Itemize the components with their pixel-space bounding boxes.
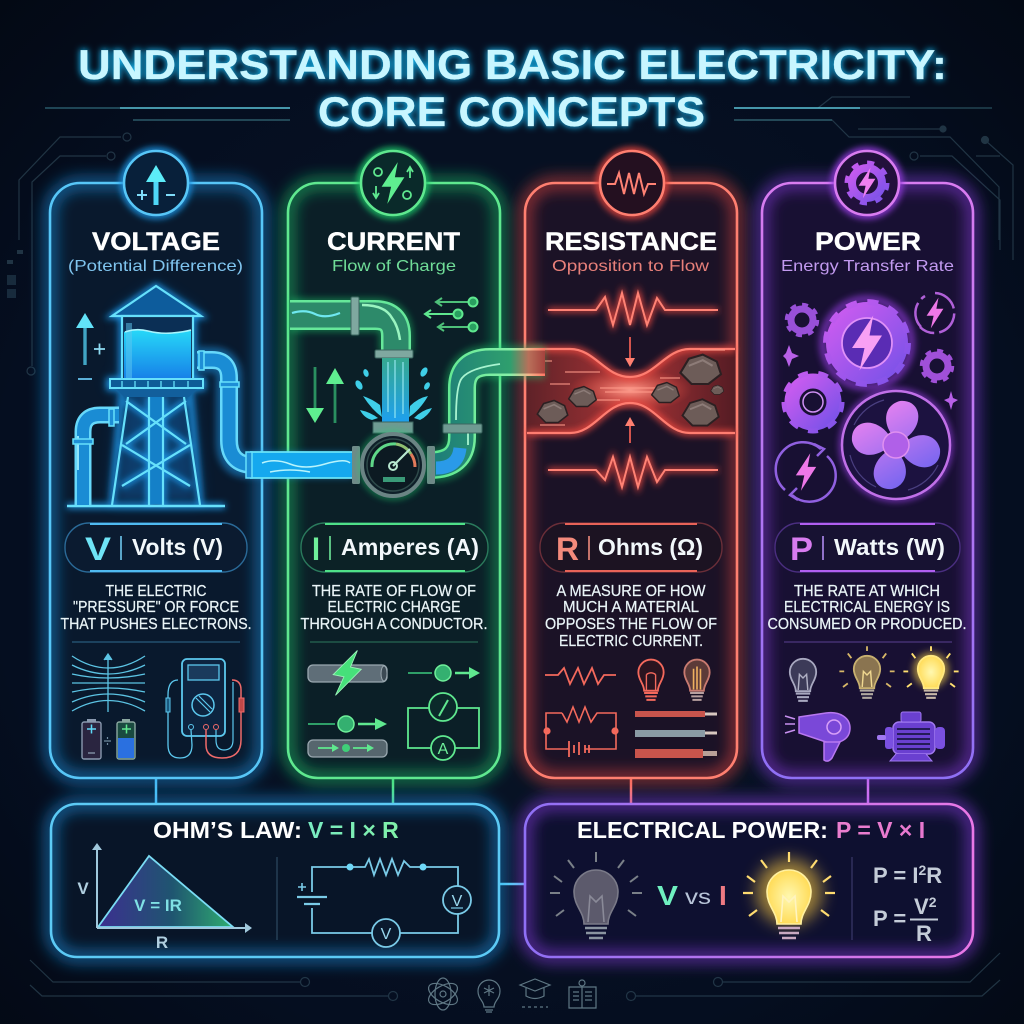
electrons moving left [425,298,478,332]
panel: current [288,150,500,778]
series circuit diagram: V [452,893,463,910]
icon: power badge [834,150,900,216]
unit pill: volts: Volts (V) [132,534,223,560]
icon: open book [569,980,596,1008]
current description: THROUGH A CONDUCTOR. [300,616,488,633]
icon: electric motor [877,712,945,761]
unit pill: amperes [301,523,488,572]
subtitle: opposition to flow: Opposition to Flow [552,258,710,275]
heading: ohm's law: OHM’S LAW: V = I × R [153,817,399,843]
icon: red bulb [638,660,664,700]
resistor wave top [548,293,718,325]
panel: resistance [525,150,737,778]
heading: electrical power: ELECTRICAL POWER: P = V × I [577,817,925,843]
voltage description: THAT PUSHES ELECTRONS. [60,616,252,633]
heading: resistance: RESISTANCE [545,228,717,256]
icon: ring bolt [915,293,954,333]
left feed pipe [78,415,119,505]
connecting pipe: voltage to current [197,351,354,478]
icon: dim bulb [790,659,816,701]
illustration: water tower [67,286,225,506]
water splash [354,366,432,420]
power description: CONSUMED OR PRODUCED. [768,616,966,633]
icon: resistance badge [599,150,665,216]
constricted pipe with rocks [527,349,735,433]
footer icons [425,978,596,1012]
icon: resistor circuit [544,707,618,757]
illustration: gears [784,299,952,431]
unit pill: volts [65,523,247,572]
title: CORE CONCEPTS [318,88,705,135]
title: CORE CONCEPTS [318,88,705,135]
voltage up arrow with polarity [76,313,105,379]
unit pill: amperes: Amperes (A) [341,534,479,560]
formula: P = V squared over R: P = [873,906,906,931]
resistance description: ELECTRIC CURRENT. [559,633,703,650]
connectors between panels and formula boxes [156,778,868,884]
subtitle: potential difference: (Potential Difference) [68,258,243,275]
triangle graph: V = IR [134,896,182,915]
triangle graph: R [156,933,168,952]
panel: power [762,150,973,778]
formula: P = I squared R: 2 [918,862,926,878]
icon: warm glowing bulb [839,646,895,698]
icon: resistor symbol [545,668,616,684]
icon: electric field lines [72,654,145,712]
icon: cycle bolt [776,442,836,502]
icon: voltage badge [123,150,189,216]
icon: graduation cap [520,979,550,1007]
label: V vs I: I [719,880,727,911]
icon: atom [425,978,461,1010]
voltage description: "PRESSURE" OR FORCE [73,599,239,616]
title: UNDERSTANDING BASIC ELECTRICITY: [78,41,947,88]
power description: ELECTRICAL ENERGY IS [784,599,950,616]
triangle graph [77,843,252,952]
icon: dim bulb large [550,852,642,938]
icon: current badge [360,150,426,216]
icon: lit bulb large [743,852,835,938]
resistance description: OPPOSES THE FLOW OF [545,616,717,633]
heading: voltage: VOLTAGE [92,228,220,256]
icon: electron arrow bottom [308,716,387,732]
icon: ammeter circuit: A [438,741,449,758]
formula: P = V squared over R: R [916,921,932,946]
icon: flow meter gauge [352,433,435,497]
formula box: electrical power [525,804,973,957]
formula box: ohm's law [51,804,499,957]
label: V vs I: V [657,880,678,911]
power description [768,583,966,633]
formula: P = I squared R: P = I [873,863,918,888]
unit pill: watts: P [790,531,813,567]
formula: P = V squared over R: 2 [929,894,937,910]
voltage description: THE ELECTRIC [106,583,206,600]
icon: idea bulb [478,980,500,1012]
icon: warm bulb [684,660,710,700]
heading: current: CURRENT [327,228,460,256]
formula: P = I squared R: R [926,863,942,888]
unit pill: amperes: I [312,531,320,567]
subtitle: energy transfer rate: Energy Transfer Rate [781,258,954,275]
series circuit diagram [297,859,471,947]
unit pill: ohms [540,523,722,572]
unit pill: ohms: Ohms (Ω) [598,534,703,560]
current direction arrows [306,367,344,423]
unit pill: ohms: R [556,531,579,567]
title: UNDERSTANDING BASIC ELECTRICITY: [78,41,947,88]
resistance description: MUCH A MATERIAL [563,599,699,616]
resistor wave bottom [548,457,718,487]
icon: fan [842,391,950,499]
current description: ELECTRIC CHARGE [328,599,460,616]
current description [300,583,488,633]
formula: P = V squared over R [873,894,938,946]
arrow: pinch up [625,417,635,443]
unit pill: volts: V [85,531,112,567]
unit pill: watts [775,523,960,572]
heading: power: POWER [815,228,921,256]
panel: voltage [50,150,262,778]
connecting pipe: current to resistance [430,362,545,468]
icon: electron arrow top [408,665,480,681]
power description: THE RATE AT WHICH [794,583,940,600]
formula: P = V squared over R: V [914,894,929,919]
series circuit diagram: V [381,926,392,943]
icon: wires [635,711,717,758]
triangle graph: V [77,879,89,898]
icon: ammeter circuit [408,693,479,760]
icon: hair dryer [785,713,850,761]
resistance description [545,583,717,650]
icon: sparkles [783,345,958,410]
resistance description: A MEASURE OF HOW [556,583,706,600]
current description: THE RATE OF FLOW OF [312,583,476,600]
label: V vs I: vs [685,886,711,909]
label: V vs I [657,880,727,911]
subtitle: flow of charge: Flow of Charge [332,258,456,275]
icon: batteries [82,719,135,759]
unit pill: watts: Watts (W) [834,534,945,560]
arrow: pinch down [625,337,635,367]
icon: bright bulb [903,646,959,698]
title [78,41,947,135]
voltage description [60,583,252,633]
title side rules [45,108,992,120]
icon: multimeter [166,659,244,758]
illustration: water pipe with splash [290,297,432,433]
icon: conductor with bolt [308,647,387,699]
icon: conductor with electrons [308,740,387,757]
